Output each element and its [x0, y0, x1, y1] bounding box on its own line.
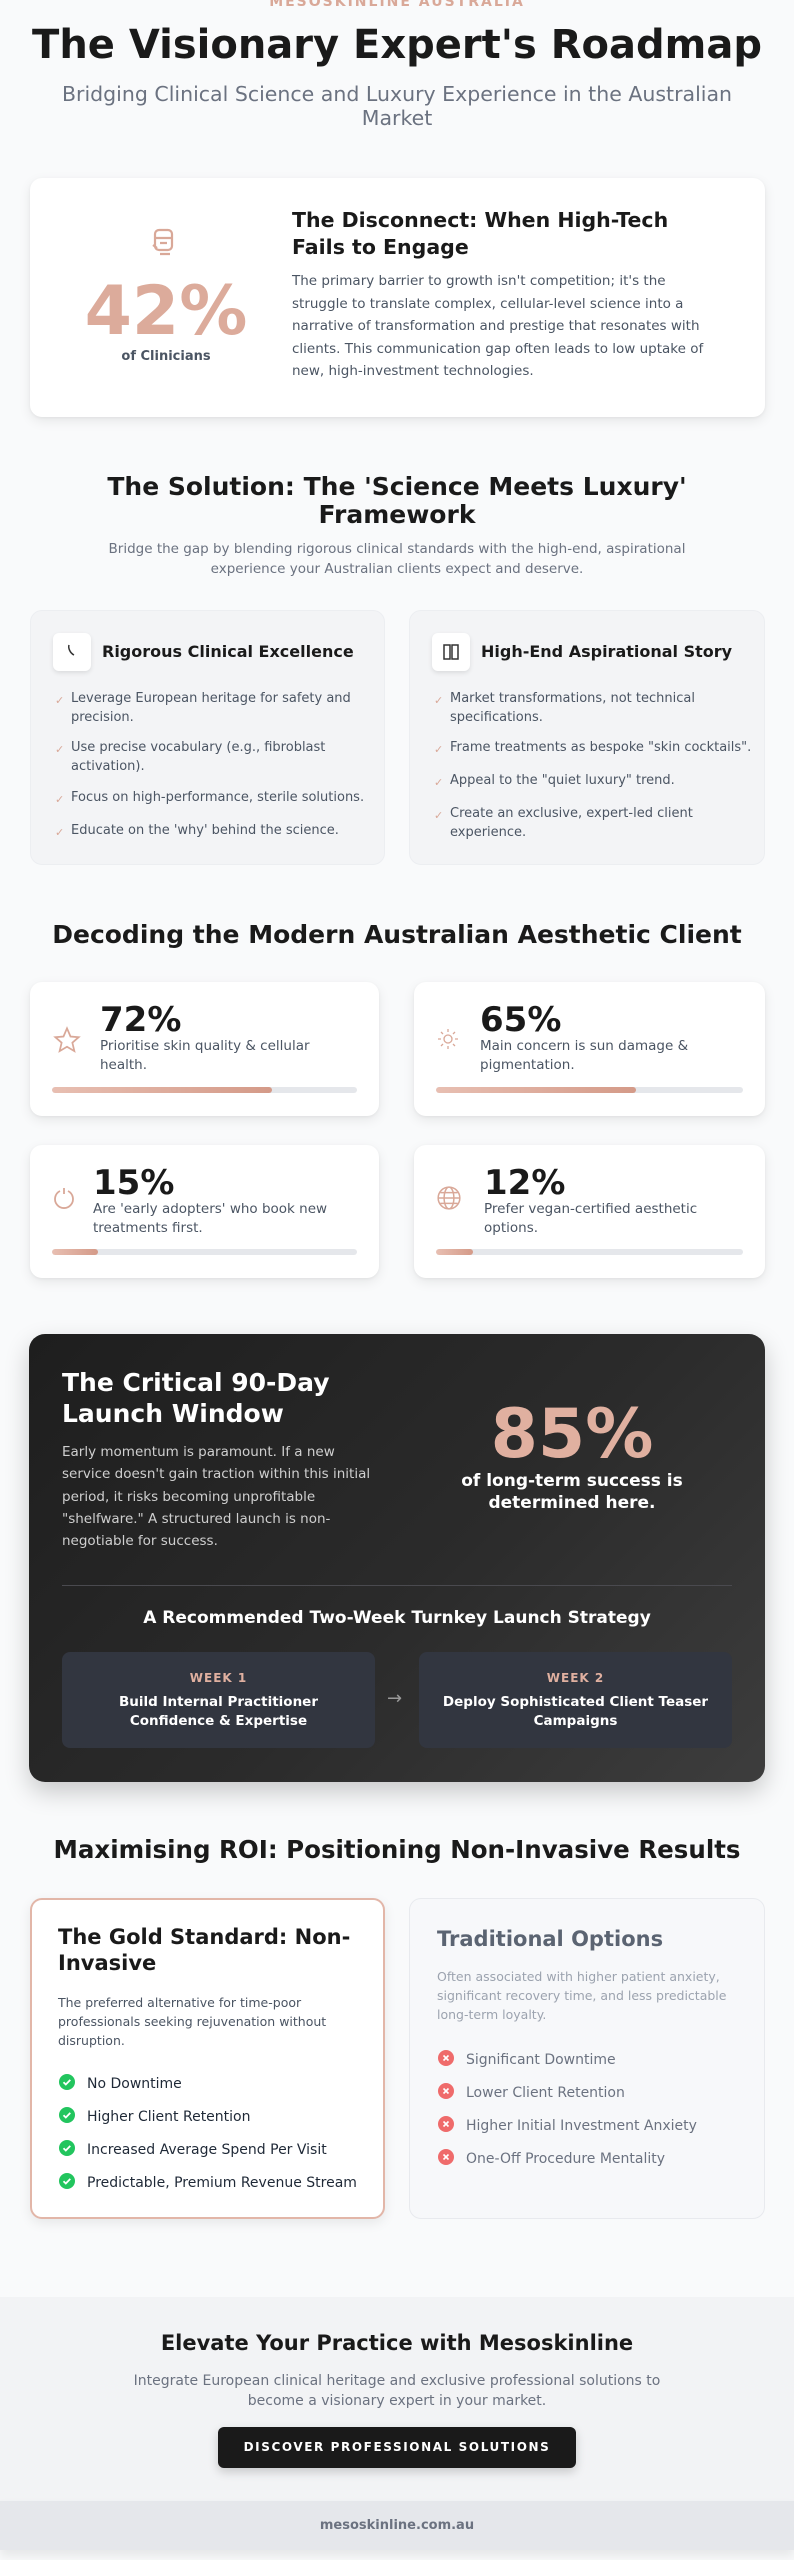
stat caption [461, 1471, 683, 1513]
text block: struggle to translate complex, cellular-level science into a [292, 296, 683, 312]
heading: solution: Framework [319, 500, 475, 529]
text: Often associated with higher patient anxiety, [437, 1969, 720, 1984]
text: significant recovery time, and less predictable [437, 1988, 726, 2003]
stat card: 72%: 72% [100, 1000, 181, 1040]
heading: Invasive [58, 1951, 156, 1975]
week 1 [62, 1652, 375, 1748]
list: ✓ [434, 809, 443, 822]
stat card: 65% [414, 982, 765, 1116]
list: Educate on the 'why' behind the science. [71, 823, 339, 838]
list: drawbacks: Significant Downtime [466, 2052, 616, 2068]
heading [62, 1368, 330, 1428]
subtitle: Bridging Clinical Science and Luxury Experience in the Australian [62, 82, 732, 106]
icon: phone [53, 633, 91, 671]
list: Leverage European heritage for safety and [71, 691, 351, 706]
text [58, 1995, 326, 2048]
bar [52, 1249, 357, 1255]
list: benefits: No Downtime [87, 2076, 182, 2092]
list: Appeal to the "quiet luxury" trend. [450, 773, 675, 788]
list: benefits: Higher Client Retention [87, 2109, 250, 2125]
panel: aspirational story [409, 610, 765, 865]
text: Integrate European clinical heritage and exclusive professional solutions to [134, 2373, 660, 2389]
heading [292, 208, 668, 259]
list: activation). [71, 759, 145, 774]
list: drawbacks [438, 2050, 697, 2167]
heading: Launch Window [62, 1399, 284, 1428]
text: solution intro: experience your Australian clients expect and deserve. [211, 561, 583, 577]
week 2: Campaigns [534, 1713, 617, 1729]
footer: mesoskinline.com.au [320, 2518, 474, 2533]
panel: call to action [0, 2297, 794, 2501]
text: solution intro: Bridge the gap by blending rigorous clinical standards with the high-end, aspirational [109, 541, 685, 557]
stat card: 65%: pigmentation. [480, 1057, 575, 1073]
icon: power [54, 1188, 74, 1209]
heading: The Disconnect: When High-Tech [292, 208, 668, 232]
list: Frame treatments as bespoke "skin cocktails". [450, 740, 751, 755]
text block: narrative of transformation and prestige that resonates with [292, 318, 700, 334]
week 2 [419, 1652, 732, 1748]
title: The Visionary Expert's Roadmap [32, 22, 762, 68]
list: ✓ [55, 694, 64, 707]
text: disruption. [58, 2033, 125, 2048]
text [134, 2373, 660, 2409]
stat card: 15%: 15% [93, 1163, 174, 1203]
text: solution intro [109, 541, 685, 577]
stat: 42%: 42% [85, 272, 247, 351]
heading: High-End Aspirational Story [481, 642, 732, 661]
text block: period, it risks becoming unprofitable [62, 1489, 315, 1505]
list: Create an exclusive, expert-led client [450, 806, 693, 821]
text block: negotiable for success. [62, 1533, 218, 1549]
stat caption: determined here. [488, 1493, 656, 1513]
stat card: 15% [30, 1145, 379, 1278]
list: precision. [71, 710, 134, 725]
week 2: WEEK 2 [547, 1671, 604, 1685]
list: drawbacks: Lower Client Retention [466, 2085, 625, 2101]
list [55, 691, 364, 839]
heading: The Critical 90-Day [62, 1368, 330, 1397]
week 1: Build Internal Practitioner [119, 1694, 318, 1710]
list: ✓ [434, 743, 443, 756]
subtitle: Market [362, 106, 432, 130]
text: become a visionary expert in your market. [248, 2393, 546, 2409]
stat card: 72% [30, 982, 379, 1116]
stat caption: of long-term success is [461, 1471, 683, 1491]
icon: clinician [152, 228, 174, 256]
arrow: → [387, 1688, 402, 1709]
list: Focus on high-performance, sterile solutions. [71, 790, 364, 805]
text block: new, high-investment technologies. [292, 363, 534, 379]
bar [436, 1087, 743, 1093]
heading: Elevate Your Practice with Mesoskinline [161, 2331, 633, 2355]
footer [0, 2501, 794, 2550]
stat card: 65%: Main concern is sun damage & [480, 1038, 688, 1054]
list: ✓ [55, 793, 64, 806]
list: ✓ [434, 776, 443, 789]
list: drawbacks: Higher Initial Investment Anxiety [466, 2118, 697, 2134]
icon: globe [437, 1186, 461, 1210]
subtitle [62, 82, 732, 130]
heading: The Gold Standard: Non- [58, 1925, 350, 1949]
icon: sun [438, 1029, 458, 1049]
stat label: of Clinicians [121, 349, 211, 364]
list: ✓ [55, 743, 64, 756]
list [434, 691, 751, 840]
list: experience. [450, 825, 526, 840]
list: ✓ [434, 694, 443, 707]
text block: clients. This communication gap often leads to low uptake of [292, 340, 703, 356]
bar [52, 1087, 357, 1093]
list: ✓ [55, 826, 64, 839]
stat card: 12%: Prefer vegan-certified aesthetic [484, 1201, 697, 1217]
panel: clinical excellence [30, 610, 385, 865]
list: drawbacks: One-Off Procedure Mentality [466, 2151, 665, 2167]
heading: solution: The Solution: The 'Science Meets Luxury' [107, 472, 687, 501]
heading: ROI: Maximising ROI: Positioning Non-Invasive Results [53, 1835, 741, 1864]
panel: gold standard [30, 1898, 385, 2219]
heading: Rigorous Clinical Excellence [102, 642, 354, 661]
divider [62, 1585, 732, 1586]
panel: traditional options [409, 1898, 765, 2219]
list: Market transformations, not technical [450, 691, 695, 706]
icon: star [53, 1026, 81, 1053]
heading: solution [107, 472, 687, 529]
text: professionals seeking rejuvenation without [58, 2014, 326, 2029]
stat card: 15%: treatments first. [93, 1220, 203, 1236]
stat: 85%: 85% [491, 1395, 653, 1474]
heading: Traditional Options [437, 1927, 663, 1951]
button: DISCOVER PROFESSIONAL SOLUTIONS [244, 2440, 550, 2454]
list: specifications. [450, 710, 543, 725]
text block: Early momentum is paramount. If a new [62, 1444, 335, 1460]
heading: Fails to Engage [292, 235, 469, 259]
text [437, 1969, 726, 2022]
list: Use precise vocabulary (e.g., fibroblast [71, 740, 325, 755]
text block: "shelfware." A structured launch is non- [62, 1511, 330, 1527]
list: benefits [59, 2074, 357, 2191]
week 1: Confidence & Expertise [130, 1713, 307, 1729]
text: The preferred alternative for time-poor [58, 1995, 301, 2010]
stat card: 15%: Are 'early adopters' who book new [93, 1201, 327, 1217]
text block: service doesn't gain traction within this initial [62, 1466, 370, 1482]
stat card: 72%: Prioritise skin quality & cellular [100, 1038, 310, 1054]
week 1: WEEK 1 [190, 1671, 247, 1685]
list: benefits: Increased Average Spend Per Visit [87, 2142, 327, 2158]
stat card: 12%: options. [484, 1220, 538, 1236]
stat card: 12%: 12% [484, 1163, 565, 1203]
stat card: 12% [414, 1145, 765, 1278]
text block [62, 1444, 370, 1549]
panel: 90-day launch window [29, 1334, 765, 1782]
subheading: A Recommended Two-Week Turnkey Launch Strategy [143, 1608, 651, 1628]
icon: book [432, 633, 470, 671]
panel: disconnect [30, 178, 765, 417]
stat card: 65%: 65% [480, 1000, 561, 1040]
text block: The primary barrier to growth isn't competition; it's the [292, 273, 666, 289]
button [218, 2427, 576, 2468]
text block [292, 273, 704, 379]
heading: client: Decoding the Modern Australian Aesthetic Client [52, 920, 742, 949]
heading [58, 1925, 350, 1975]
list: benefits: Predictable, Premium Revenue Stream [87, 2175, 357, 2191]
stat card: 72%: health. [100, 1057, 147, 1073]
bar [436, 1249, 743, 1255]
week 2: Deploy Sophisticated Client Teaser [443, 1694, 708, 1710]
text: long-term loyalty. [437, 2007, 546, 2022]
